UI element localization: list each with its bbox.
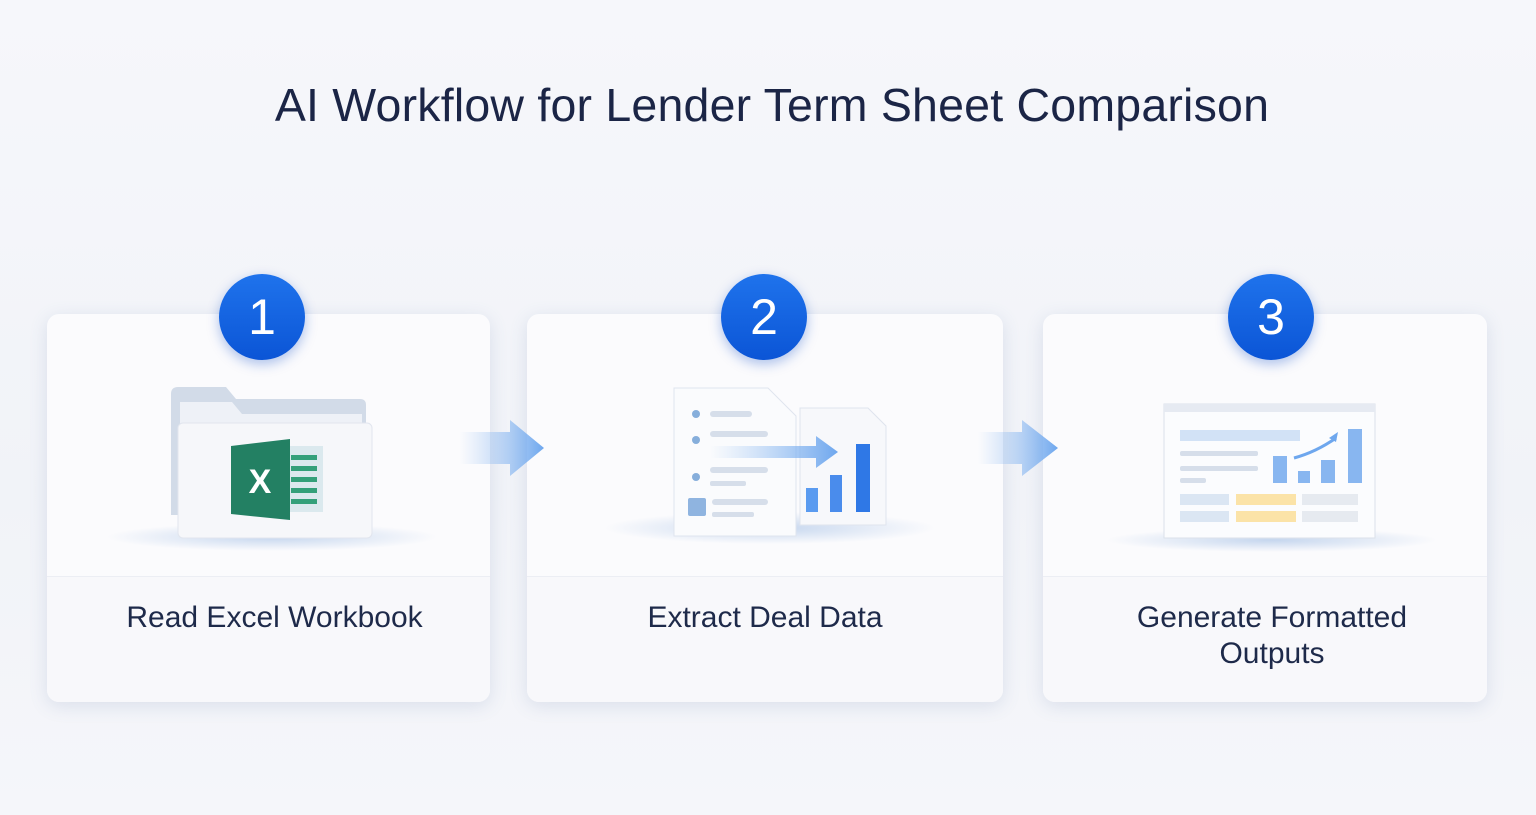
badge 3: [1228, 274, 1314, 360]
label: step 3: [1137, 601, 1407, 670]
badge 1: 1: [248, 289, 276, 345]
label: step 2: Extract Deal Data: [647, 601, 883, 634]
badge 2: 2: [750, 289, 778, 345]
label: step 1: Read Excel Workbook: [126, 601, 423, 634]
label: step 3: Generate Formatted: [1137, 601, 1407, 634]
icon: excel folder: X: [249, 463, 272, 501]
icon: formatted report: [1107, 404, 1437, 552]
badge 1: [219, 274, 305, 360]
arrow 1: [460, 420, 544, 476]
badge 2: [721, 274, 807, 360]
panel: step 3: [1043, 314, 1487, 702]
title: AI Workflow for Lender Term Sheet Comparison: [275, 79, 1269, 131]
icon: excel folder: [107, 387, 437, 551]
panel: step 1: [47, 314, 490, 702]
icon: extract documents: [605, 388, 935, 544]
arrow 2: [978, 420, 1058, 476]
badge 3: 3: [1257, 289, 1285, 345]
label: step 3: Outputs: [1219, 637, 1325, 670]
panel: step 2: [527, 314, 1003, 702]
